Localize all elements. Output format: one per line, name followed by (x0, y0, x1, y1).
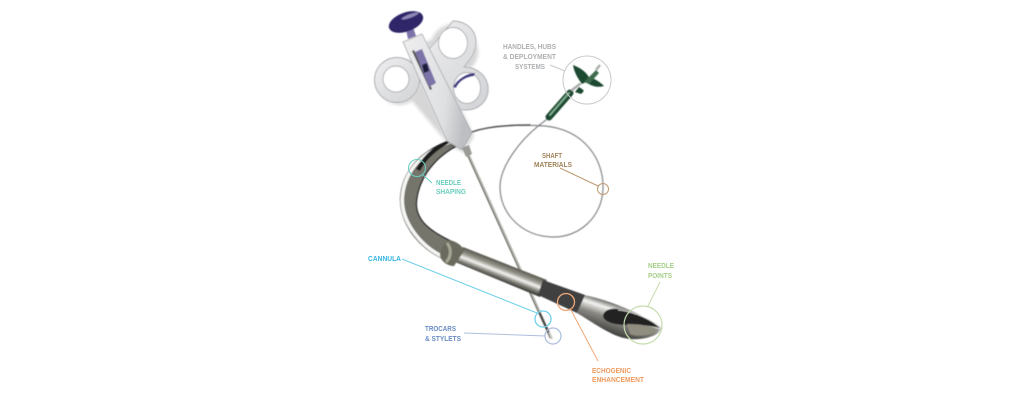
luer hub of stylet (462, 145, 472, 157)
straight cannula shaft (455, 247, 547, 297)
deployment hub inset (573, 65, 604, 94)
callout: needle shaping (408, 160, 432, 183)
callout: trocars and stylets (464, 328, 561, 344)
label: shaft materials (534, 151, 572, 169)
label: needle shaping (436, 178, 466, 196)
label: needle points: POINTS (648, 271, 672, 280)
purple slider and plunger (386, 7, 475, 90)
label: needle points (648, 261, 674, 280)
label: echogenic enhancement: ECHOGENIC (592, 366, 631, 375)
callout: handles, hubs and deployment systems (550, 56, 611, 104)
label: handles, hubs and deployment systems: SYSTEMS (515, 62, 545, 71)
callout: shaft materials (560, 168, 608, 194)
coiled wire shaft loop (472, 120, 603, 237)
callout: cannula (402, 259, 551, 327)
thin stylet shaft (466, 150, 552, 339)
syringe handle rings (374, 21, 488, 110)
echogenic band (538, 280, 585, 313)
label: echogenic enhancement (592, 366, 644, 384)
label: shaft materials: MATERIALS (534, 160, 572, 169)
label: trocars and stylets (425, 324, 461, 343)
needle tip body (577, 295, 663, 339)
label: cannula: CANNULA (368, 254, 401, 263)
label: handles, hubs and deployment systems: HANDLES, HUBS (503, 42, 556, 51)
curved cannula tube (399, 140, 456, 259)
label: needle shaping: SHAPING (436, 187, 466, 196)
label: needle points: NEEDLE (648, 261, 674, 270)
label: echogenic enhancement: ENHANCEMENT (592, 375, 644, 384)
callout: needle points (624, 282, 662, 344)
callout rings and leaders (402, 56, 662, 361)
label: handles, hubs and deployment systems: & DEPLOYMENT (503, 52, 556, 61)
label: trocars and stylets: TROCARS (425, 324, 456, 333)
syringe body (403, 34, 472, 150)
handle hub: green grip (549, 84, 580, 117)
callout: echogenic enhancement (558, 294, 598, 361)
label: needle shaping: NEEDLE (436, 178, 461, 187)
label: handles, hubs and deployment systems (503, 42, 556, 71)
illustration: needle assembly (374, 7, 663, 339)
cannula collar (440, 240, 464, 266)
label: trocars and stylets: & STYLETS (425, 334, 461, 343)
handle shadow (380, 24, 488, 153)
label: shaft materials: SHAFT (542, 151, 562, 160)
